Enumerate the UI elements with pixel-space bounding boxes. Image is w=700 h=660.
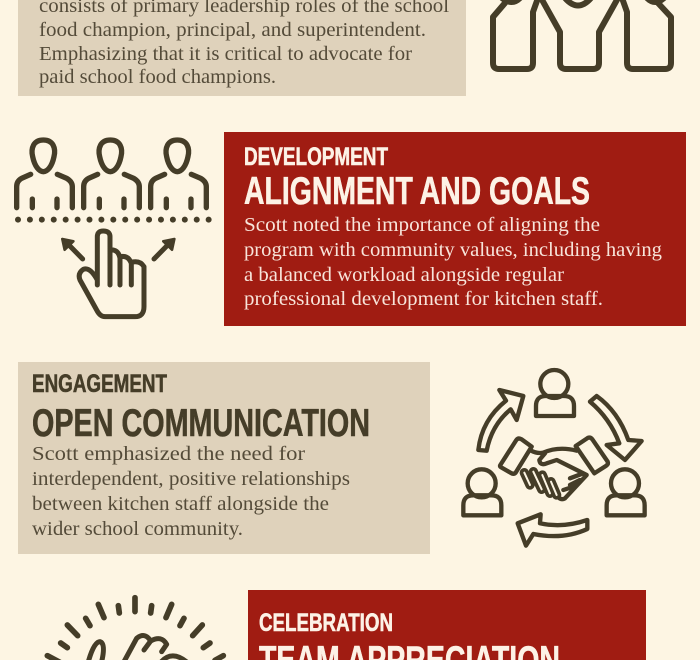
panel: leadership team: food champion, principal, and superintendent. [39, 19, 426, 41]
panel: leadership team: Emphasizing that it is critical to advocate for [39, 43, 412, 65]
panel: engagement: OPEN COMMUNICATION [32, 402, 370, 445]
icon: three people row [17, 140, 211, 220]
panel: development: Scott noted the importance of aligning the [244, 214, 600, 236]
panel: engagement: Scott emphasized the need for [32, 443, 305, 465]
hands [88, 636, 188, 660]
left cuff [500, 438, 532, 474]
panel: celebration: CELEBRATION [259, 609, 393, 637]
fingers [524, 472, 557, 495]
right arrow [154, 239, 174, 259]
panel: leadership team [18, 0, 466, 96]
panel: engagement: ENGAGEMENT [32, 370, 167, 398]
panel: engagement: wider school community. [32, 518, 243, 540]
icon: three people with raised arms [493, 0, 671, 69]
hand [79, 231, 144, 317]
panel: development [224, 132, 686, 326]
icon: people and cycle arrows [463, 370, 645, 546]
arrow: left to top [478, 390, 523, 451]
panel: engagement: between kitchen staff alongside the [32, 493, 329, 515]
panel: celebration [248, 590, 646, 660]
dotted line [18, 211, 211, 229]
arrow: right to left [518, 514, 587, 546]
panel: development: DEVELOPMENT [244, 143, 388, 171]
left arrow [62, 239, 83, 259]
panel: development: a balanced workload alongside regular [244, 264, 564, 286]
rays [47, 598, 223, 660]
right cuff [576, 438, 608, 473]
panel: development: program with community values, including having [244, 239, 662, 261]
icon: pointing hand with arrows [62, 231, 174, 317]
panel: engagement [18, 362, 430, 554]
person 2 [84, 140, 139, 208]
left person [463, 469, 501, 515]
person 1 [17, 140, 72, 208]
icon: celebrating hands with rays [47, 598, 223, 660]
panel: development: professional development for kitchen staff. [244, 288, 603, 310]
icon: handshake [500, 438, 608, 499]
right person [607, 469, 645, 515]
top person [536, 370, 574, 416]
panel: leadership team: paid school food champions. [39, 66, 276, 88]
upper hand and thumb [530, 449, 587, 499]
panel: engagement: interdependent, positive relationships [32, 468, 350, 490]
person 3 [151, 140, 206, 208]
arrow: top to right [590, 396, 642, 460]
